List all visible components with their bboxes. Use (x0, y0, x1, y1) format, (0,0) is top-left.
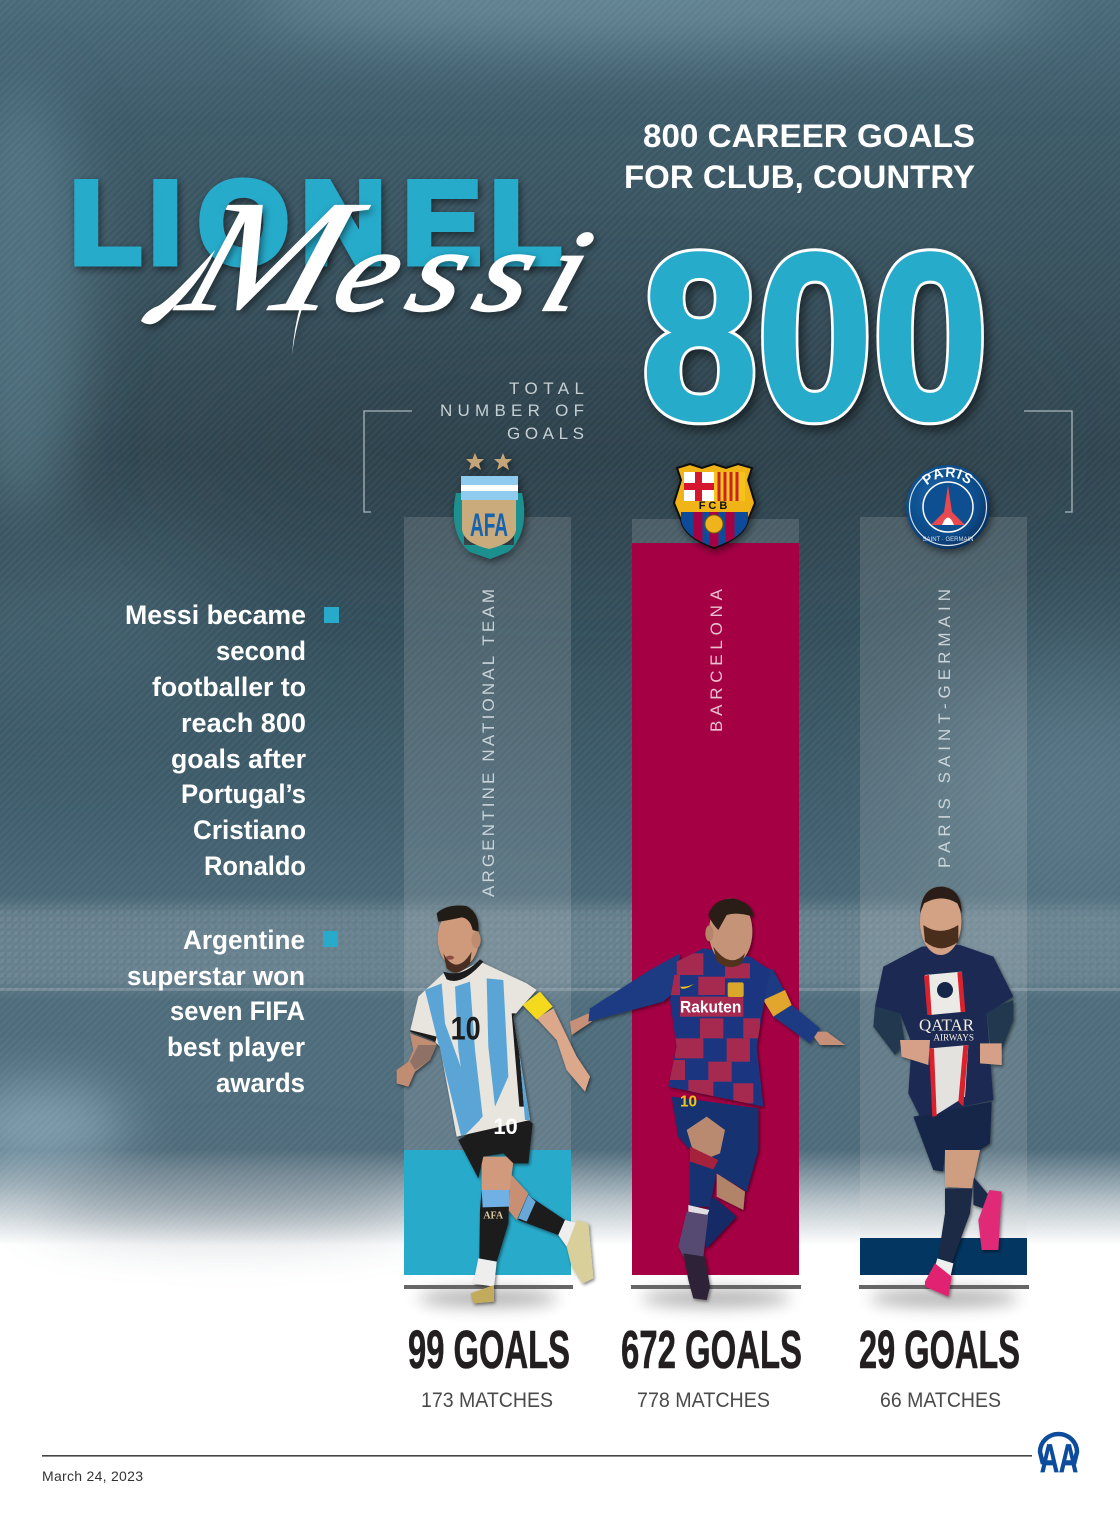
text block: second footballer to reach 800: Cristiano (193, 815, 306, 845)
crest: Paris Saint-Germain (905, 465, 995, 556)
player: Messi in PSG kit: AIRWAYS (933, 1034, 974, 1044)
crest: FC Barcelona (674, 464, 755, 549)
player: Messi in Argentina kit (397, 905, 593, 1303)
label: total number of goals (440, 379, 584, 443)
bracket: right (1024, 411, 1072, 512)
title: 800 career goals for club, country: 800 CAREER GOALS (643, 118, 975, 154)
text block: second footballer to reach 800: Ronaldo (204, 851, 306, 881)
crest: Argentina AFA: AFA (470, 507, 508, 543)
heading: LIONEL: LIONEL (70, 157, 561, 288)
text block: seven FIFA awards: superstar won (127, 961, 305, 991)
player: Messi in PSG kit: QATAR (919, 1016, 975, 1035)
text block: second footballer to reach 800: reach 800 (181, 708, 306, 738)
stat: 778 matches: 778 MATCHES (637, 1389, 770, 1412)
crest: Argentina AFA (454, 453, 524, 559)
text block: second footballer to reach 800: Messi became (125, 600, 306, 630)
bullet square 1 (324, 607, 339, 623)
stat: 672 goals: 672 GOALS (621, 1320, 802, 1380)
big number 800: 800 (642, 205, 988, 469)
player: Messi in Argentina kit: AFA (483, 1210, 504, 1221)
stat: 99 goals: 99 GOALS (408, 1320, 570, 1380)
text block: second footballer to reach 800 (125, 600, 306, 881)
crest: FC Barcelona: FCB (699, 500, 730, 512)
text block: seven FIFA awards (127, 925, 305, 1098)
footer line (42, 1455, 1032, 1457)
label: total number of goals: TOTAL (509, 379, 584, 398)
text block: second footballer to reach 800: footballer to (152, 672, 306, 702)
text block: seven FIFA awards: awards (216, 1068, 305, 1098)
date: March 24, 2023 (42, 1468, 143, 1484)
player: Messi in PSG kit (873, 887, 1013, 1297)
title: 800 career goals for club, country (624, 118, 975, 195)
big number 800: 800 (642, 205, 988, 469)
bar background: Barcelona (632, 519, 799, 1275)
text block: second footballer to reach 800: goals after (171, 744, 306, 774)
bullet square 2 (323, 931, 338, 947)
player: Messi in Barcelona kit (570, 898, 845, 1300)
stat: 29 goals: 29 GOALS (859, 1320, 1020, 1380)
text block: seven FIFA awards: Argentine (183, 925, 305, 955)
text block: second footballer to reach 800: Portugal’s (181, 779, 306, 809)
stat: 66 matches: 66 MATCHES (880, 1389, 1001, 1412)
text block: seven FIFA awards: seven FIFA (170, 996, 305, 1026)
stat: 173 matches: 173 MATCHES (421, 1389, 553, 1412)
label: total number of goals: GOALS (507, 424, 584, 443)
label: total number of goals: NUMBER OF (440, 401, 584, 420)
player: Messi in Barcelona kit: Rakuten (680, 998, 741, 1017)
player: Messi in Barcelona kit: 10 (680, 1094, 697, 1111)
title: 800 career goals for club, country: FOR CLUB, COUNTRY (624, 159, 975, 195)
bar value: Barcelona 672 goals (632, 543, 799, 1275)
bracket: left (364, 411, 412, 512)
text block: second footballer to reach 800: second (216, 636, 306, 666)
text block: seven FIFA awards: best player (167, 1032, 305, 1062)
logo: Anadolu Agency AA: AA (1040, 1437, 1078, 1481)
column label: Argentine National Team: ARGENTINE NATIONAL TEAM (479, 589, 498, 897)
bar value: Argentina 99 goals (404, 1150, 571, 1275)
player: Messi in Argentina kit: 10 (451, 1010, 481, 1046)
crest: Paris Saint-Germain: SAINT · GERMAIN (923, 537, 973, 543)
logo: Anadolu Agency AA (1040, 1434, 1078, 1481)
player: Messi in Argentina kit: 10 (493, 1114, 518, 1139)
crest: Paris Saint-Germain: PARIS (922, 467, 972, 485)
baselines with soft shadows (404, 1285, 1029, 1307)
column label: Paris Saint-Germain: PARIS SAINT-GERMAIN (935, 589, 954, 868)
bar background: Argentina (404, 517, 571, 1275)
bar value: PSG 29 goals (860, 1238, 1027, 1275)
heading: Messi script: Messi (160, 168, 634, 345)
bar background: PSG (860, 517, 1027, 1275)
column label: Barcelona: BARCELONA (707, 588, 726, 732)
